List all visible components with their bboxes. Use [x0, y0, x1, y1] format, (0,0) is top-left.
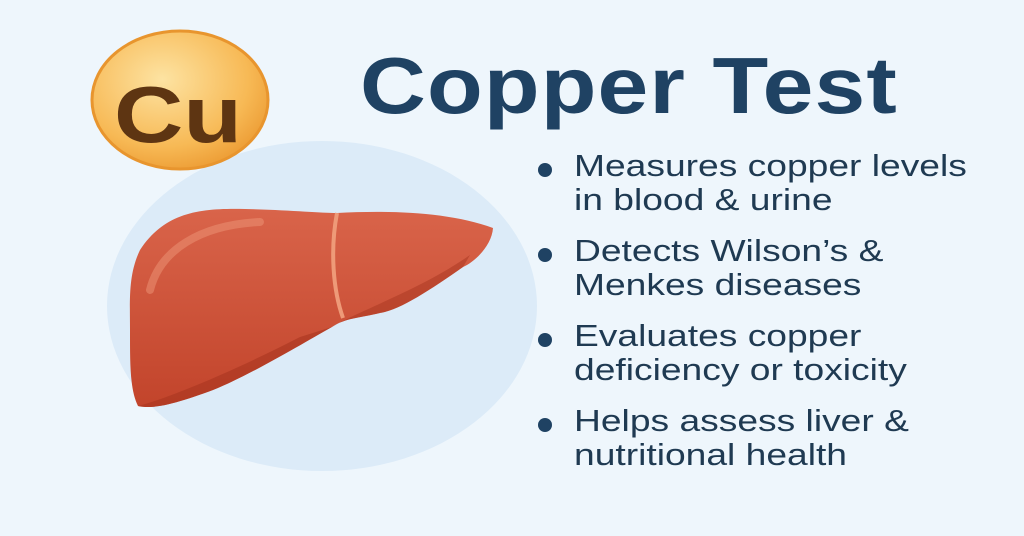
- bullet 1: [538, 148, 967, 217]
- title: Copper Test: [360, 41, 898, 130]
- bullet 3: deficiency or toxicity: [574, 352, 907, 387]
- icon: Cu badge: Cu: [114, 70, 242, 159]
- bullet 4: Helps assess liver &: [574, 403, 909, 438]
- bullet 4: nutritional health: [574, 437, 847, 472]
- bullet 1: in blood & urine: [574, 182, 833, 217]
- bullet 2: [538, 233, 883, 302]
- background circle: [107, 141, 537, 471]
- bullet 2: Menkes diseases: [574, 267, 861, 302]
- bullet 2: Detects Wilson’s &: [574, 233, 883, 268]
- icon: Cu badge: [92, 31, 268, 169]
- icon: liver: [130, 209, 493, 407]
- bullet 4: [538, 403, 909, 472]
- bullet 1: Measures copper levels: [574, 148, 967, 183]
- illustration: liver with background circle and Cu badge: [90, 30, 537, 471]
- bullet 3: [538, 318, 907, 387]
- bullet 3: Evaluates copper: [574, 318, 861, 353]
